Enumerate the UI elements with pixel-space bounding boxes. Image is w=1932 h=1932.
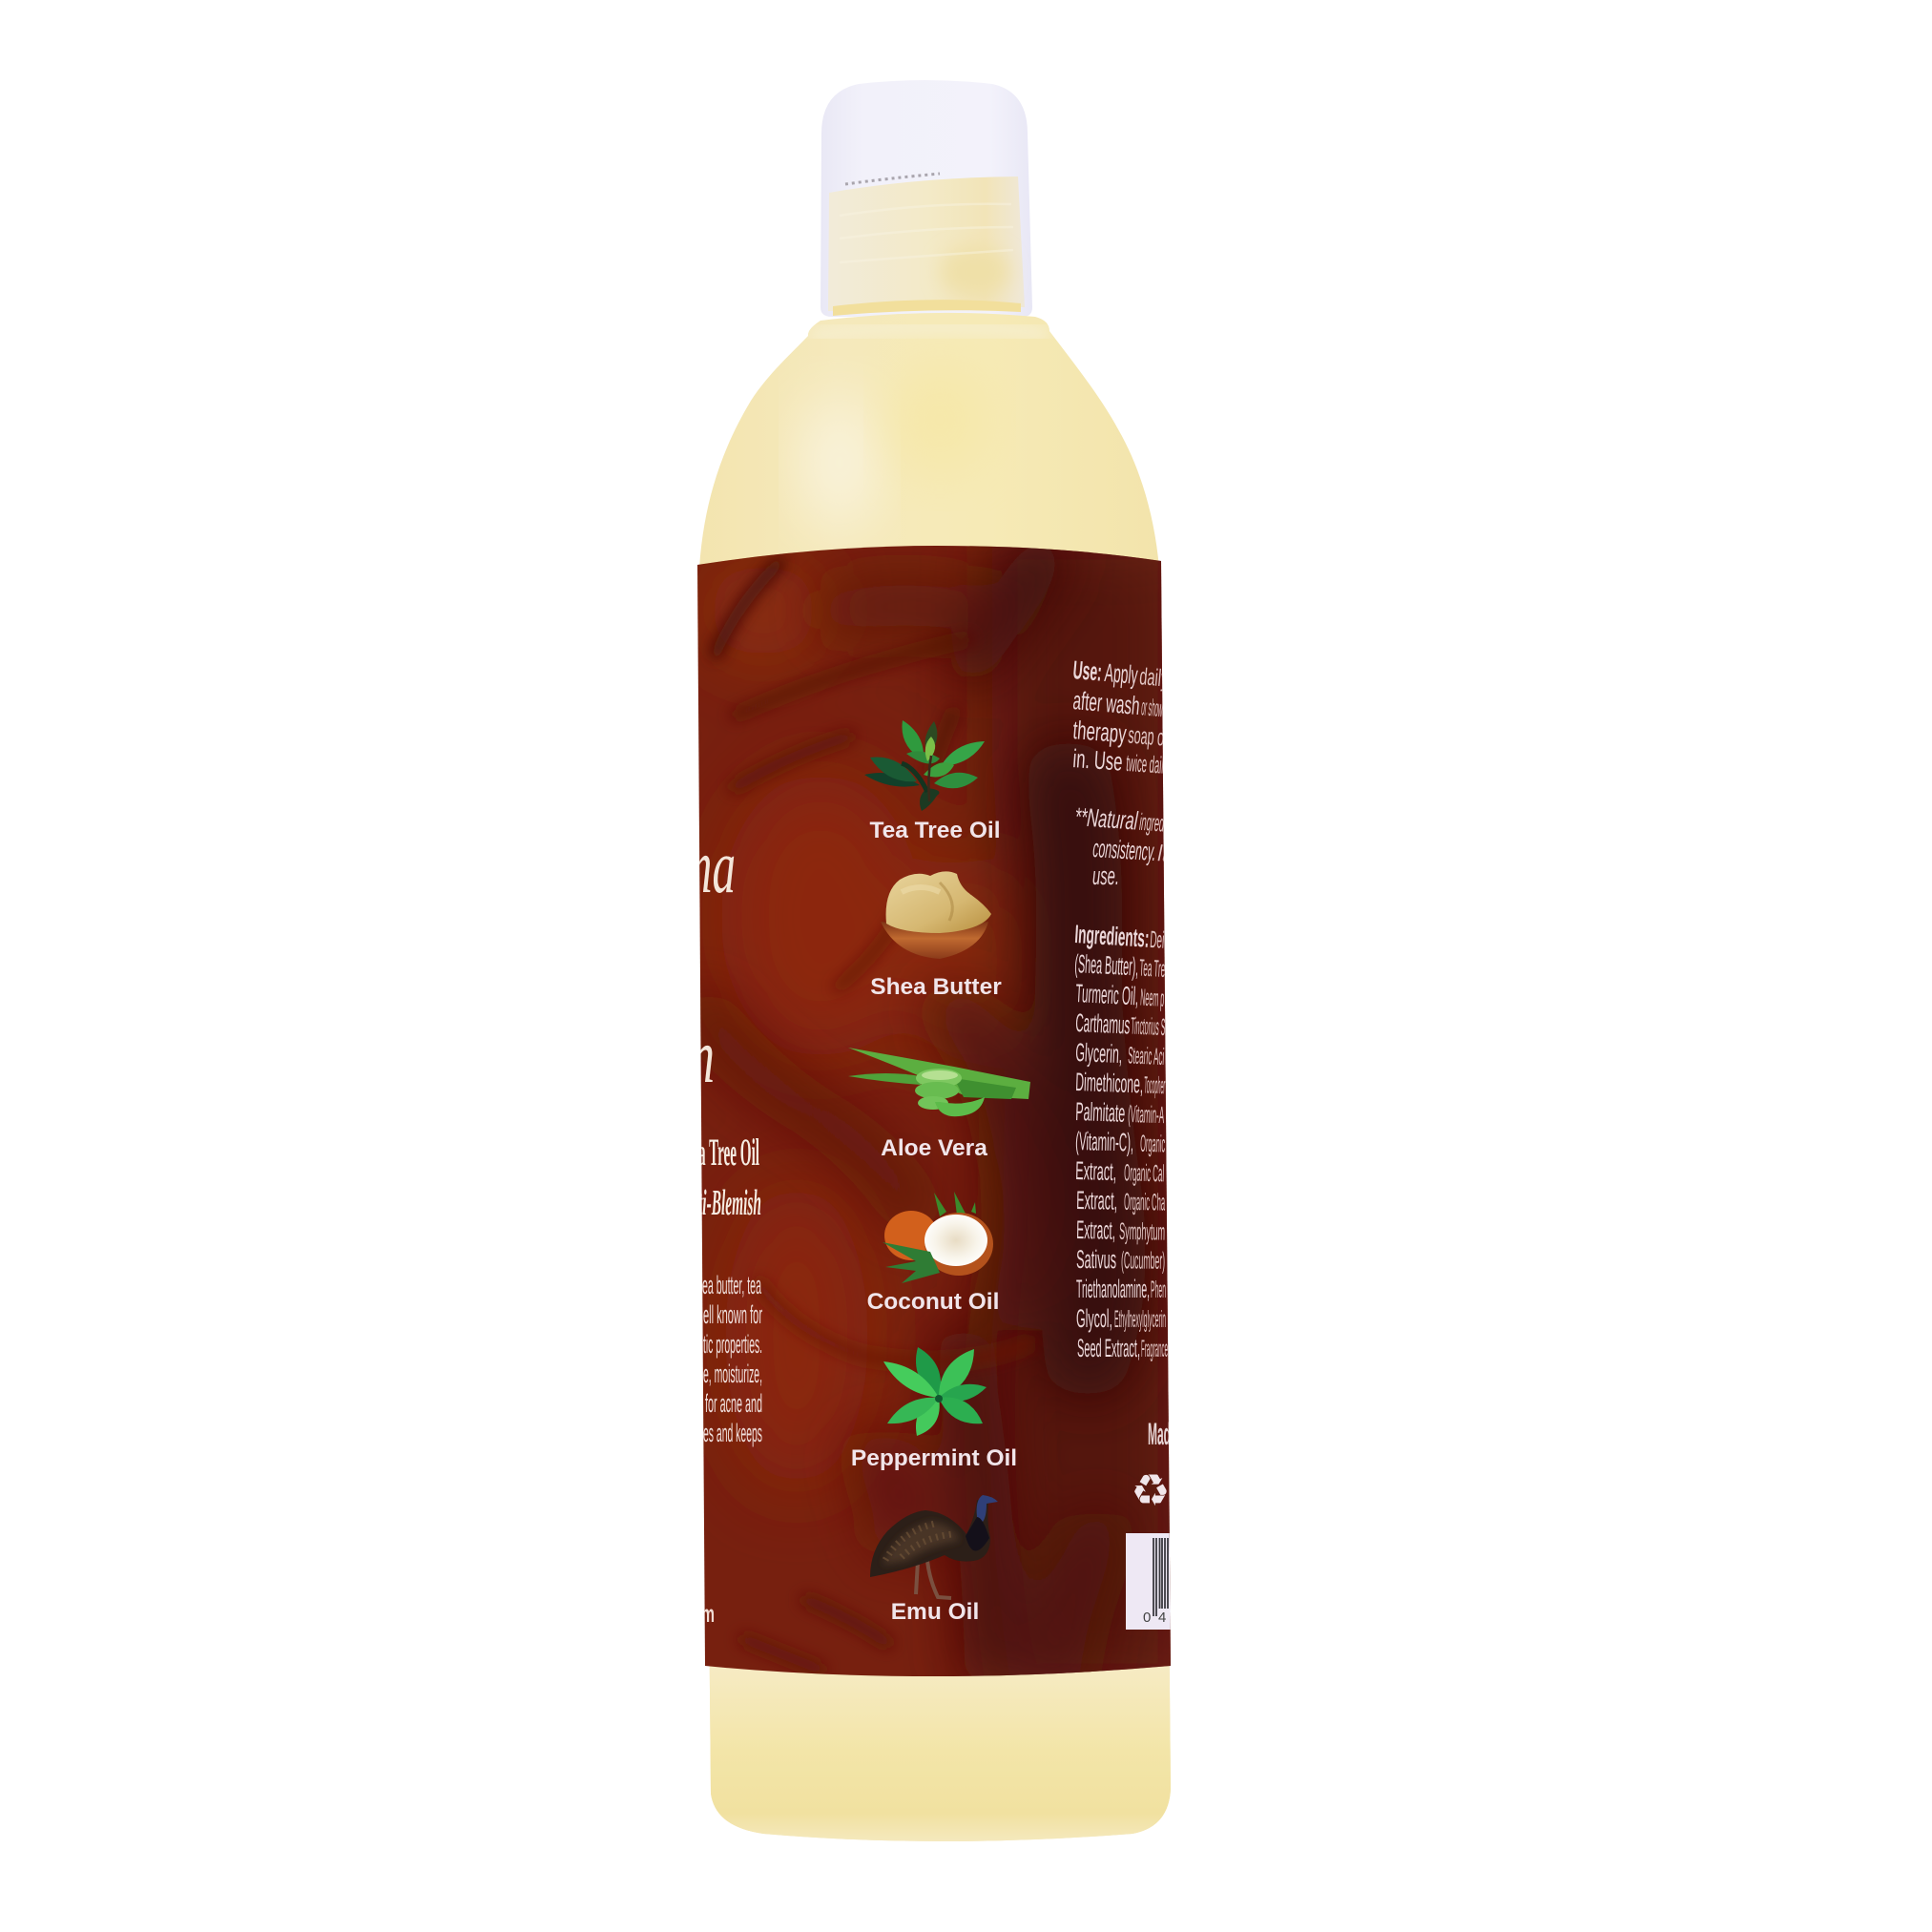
directions for use: daily <box>1138 663 1170 693</box>
text: (Vitamin-A <box>1128 1101 1165 1129</box>
label: ti-Blemish <box>698 1183 761 1223</box>
barcode: 4 <box>1158 1610 1166 1626</box>
ingredients list: Carthamus <box>1075 1008 1131 1039</box>
text: Organic Cal <box>1124 1159 1165 1187</box>
left copy fragments <box>699 855 762 1622</box>
label: aloe vera: Aloe Vera <box>881 1135 987 1161</box>
right copy column: twice daily <box>1125 750 1169 779</box>
right copy column: Tea Tre <box>1139 955 1166 983</box>
label: a Tree Oil <box>698 1131 759 1174</box>
text: Stearic Aci <box>1128 1042 1165 1070</box>
right copy column: Neem p <box>1140 985 1165 1012</box>
text: Organic Cha <box>1124 1189 1165 1216</box>
text: Tinctorius S <box>1131 1013 1166 1041</box>
label: peppermint oil: Peppermint Oil <box>851 1445 1017 1471</box>
natural ingredients note: **Natural <box>1074 802 1139 836</box>
ingredients list <box>1074 920 1168 1362</box>
right copy column: Organic <box>1140 1131 1166 1157</box>
right copy column: Triethanolamine, <box>1076 1275 1150 1303</box>
description paragraph <box>702 1271 762 1447</box>
natural ingredients note: consistency. <box>1092 834 1156 866</box>
ingredients list: Extract, <box>1076 1186 1117 1215</box>
natural ingredients note: It <box>1157 840 1169 867</box>
product name fragment: ma <box>678 825 736 909</box>
right copy column: Symphytum <box>1119 1218 1165 1246</box>
right copy column: Mad <box>1148 1417 1171 1451</box>
label: e, moisturize, <box>703 1360 762 1388</box>
label background <box>687 534 1183 1689</box>
ingredients list: Glycerin, <box>1075 1038 1123 1069</box>
icon: emu <box>870 1495 998 1598</box>
icon: tea tree sprig <box>864 720 985 811</box>
ingredients list: Sativus <box>1076 1245 1116 1274</box>
ingredient: peppermint oil <box>851 1347 1017 1471</box>
text: Ethylhexylglycerin <box>1114 1306 1166 1333</box>
ingredients list: Seed Extract, <box>1077 1334 1140 1362</box>
right copy column: Dei <box>1149 926 1165 954</box>
label: shea butter: Shea Butter <box>870 974 1002 1000</box>
ingredients list: Dimethicone, <box>1075 1068 1144 1098</box>
text: Fragrance <box>1141 1336 1168 1362</box>
label: tea tree oil: Tea Tree Oil <box>869 818 1001 843</box>
icon: recycle symbol: ♻ <box>1131 1465 1171 1516</box>
label: tic properties. <box>703 1330 762 1359</box>
directions for use: in. Use <box>1072 744 1124 777</box>
natural ingredients note: use. <box>1092 862 1119 890</box>
text: (Cucumber) <box>1121 1247 1165 1275</box>
directions for use: therapy <box>1072 716 1128 748</box>
right copy column <box>1071 655 1183 1630</box>
icon: peppermint leaves <box>883 1347 987 1436</box>
directions for use <box>1071 655 1170 779</box>
ingredient: emu oil <box>870 1495 998 1625</box>
label: for acne and <box>705 1389 762 1418</box>
ingredient: coconut oil <box>867 1192 999 1315</box>
ingredients list: Extract, <box>1075 1156 1117 1186</box>
text: or shower <box>1140 694 1170 723</box>
label <box>678 534 1183 1689</box>
ingredients list: (Vitamin-C), <box>1075 1127 1134 1157</box>
ingredient: shea butter <box>870 871 1002 1000</box>
ingredients list: Extract, <box>1076 1215 1115 1245</box>
natural ingredients note <box>1074 802 1169 890</box>
icon: shea butter in bowl <box>881 871 991 959</box>
ingredients list: Glycol, <box>1076 1304 1112 1333</box>
barcode: 0 <box>1143 1610 1151 1626</box>
directions for use: Use: Apply <box>1071 655 1139 690</box>
ingredient: tea tree oil <box>864 720 1001 843</box>
product name fragment 2: n <box>690 1015 715 1099</box>
label: ell known for <box>703 1300 762 1329</box>
bottle body <box>687 305 1183 1860</box>
label: emu oil: Emu Oil <box>891 1599 979 1625</box>
bottle <box>678 80 1183 1860</box>
right copy column: Phen <box>1151 1277 1166 1303</box>
directions for use: after wash <box>1071 686 1141 720</box>
ingredients list: Ingredients: <box>1074 920 1150 953</box>
ingredients list: Palmitate <box>1075 1097 1126 1128</box>
web address fragment: m <box>701 1601 715 1628</box>
directions for use: soap or <box>1127 722 1169 752</box>
ingredients list: (Shea Butter), <box>1074 949 1139 981</box>
barcode <box>1126 1533 1183 1630</box>
cap <box>821 80 1032 317</box>
icon: coconut <box>883 1192 993 1283</box>
ingredients list: Turmeric Oil, <box>1075 979 1139 1010</box>
threaded neck <box>828 177 1025 311</box>
label: coconut oil: Coconut Oil <box>867 1289 999 1315</box>
text: Tocopher <box>1144 1072 1166 1099</box>
label: ea butter, tea <box>702 1271 761 1299</box>
label: es and keeps <box>703 1419 762 1447</box>
icon: aloe vera leaves <box>848 1048 1030 1116</box>
ingredient: aloe vera <box>848 1048 1030 1161</box>
right copy column: ingredi <box>1138 809 1168 838</box>
